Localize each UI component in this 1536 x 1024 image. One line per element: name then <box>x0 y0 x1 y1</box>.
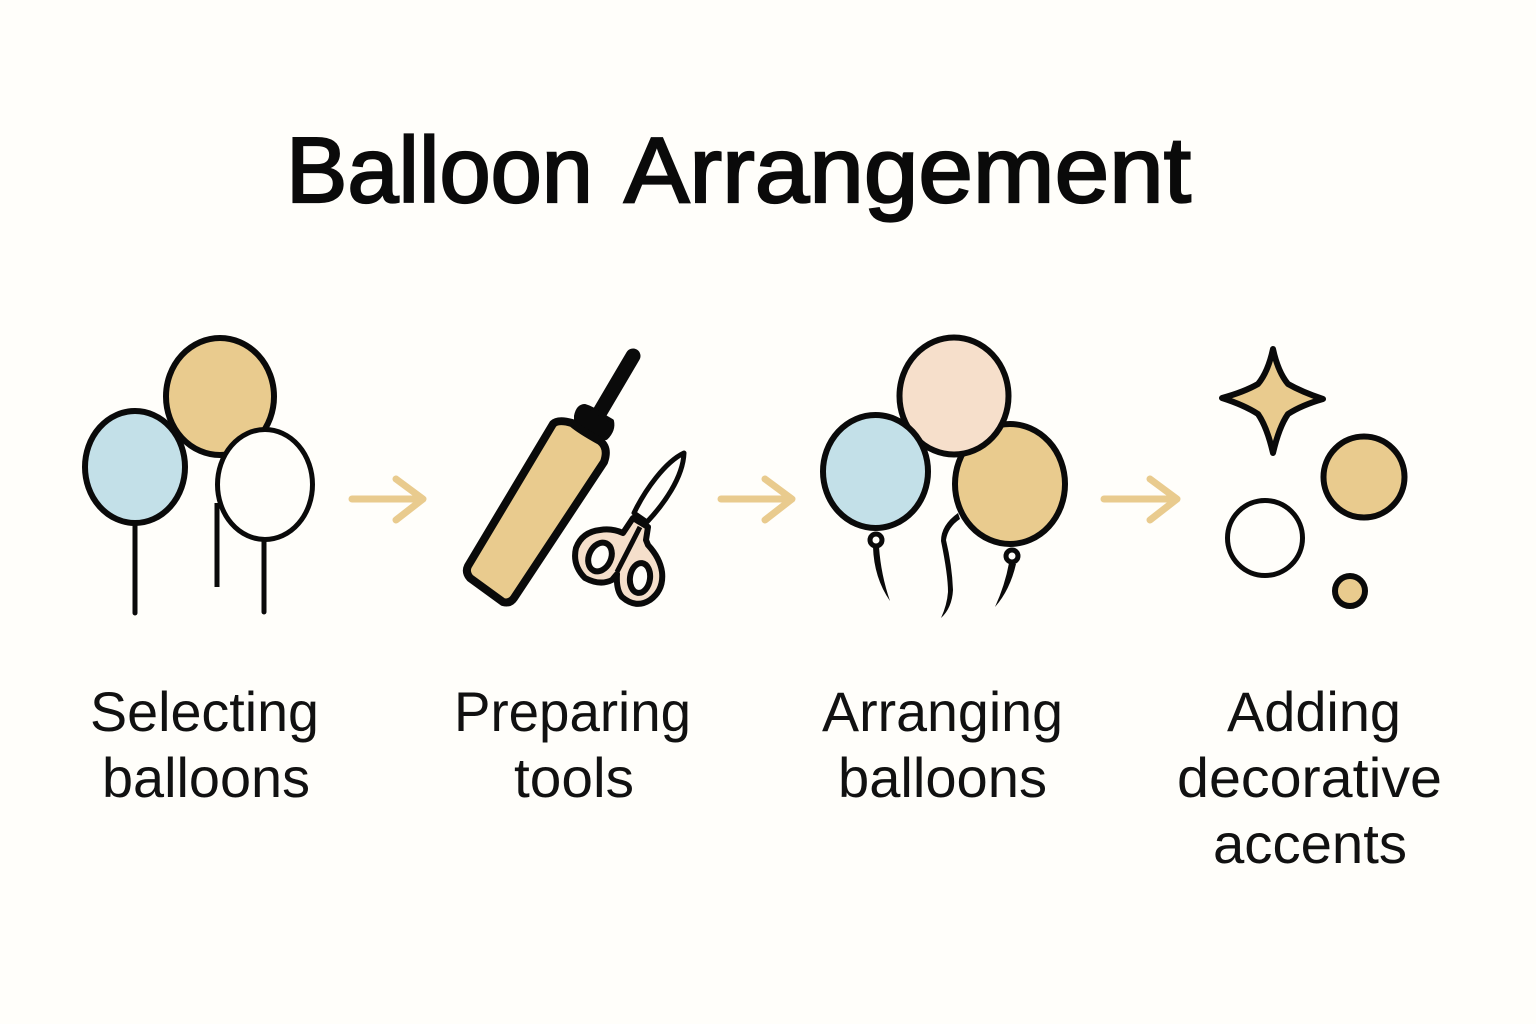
arrow 3 <box>1104 479 1177 520</box>
label: adding decorative accents: accents <box>1213 812 1407 875</box>
icon: arranging balloons <box>823 338 1065 618</box>
pump body <box>467 421 606 602</box>
title: Balloon <box>286 118 593 222</box>
label: selecting balloons <box>90 680 319 809</box>
label: preparing tools <box>454 680 691 809</box>
label: selecting balloons: balloons <box>102 746 310 809</box>
label: preparing tools: tools <box>514 746 634 809</box>
arrow 1 <box>352 479 423 520</box>
label: preparing tools: Preparing <box>454 680 691 743</box>
label: adding decorative accents: decorative <box>1177 746 1442 809</box>
icon: selecting balloons <box>85 338 312 613</box>
icon: decorative accents <box>1222 349 1404 606</box>
label: selecting balloons: Selecting <box>90 680 319 743</box>
pump collar <box>576 406 612 440</box>
label: arranging balloons: balloons <box>838 746 1047 809</box>
label: arranging balloons <box>822 680 1063 809</box>
scissors <box>575 453 684 604</box>
label: adding decorative accents <box>1177 680 1442 875</box>
strings <box>873 513 1016 618</box>
icon: preparing tools <box>467 356 684 604</box>
pump nozzle <box>600 356 633 412</box>
label: arranging balloons: Arranging <box>822 680 1063 743</box>
label: adding decorative accents: Adding <box>1227 680 1401 743</box>
arrow 2 <box>721 479 792 520</box>
title: Arrangement <box>624 118 1191 222</box>
title <box>286 118 1191 222</box>
